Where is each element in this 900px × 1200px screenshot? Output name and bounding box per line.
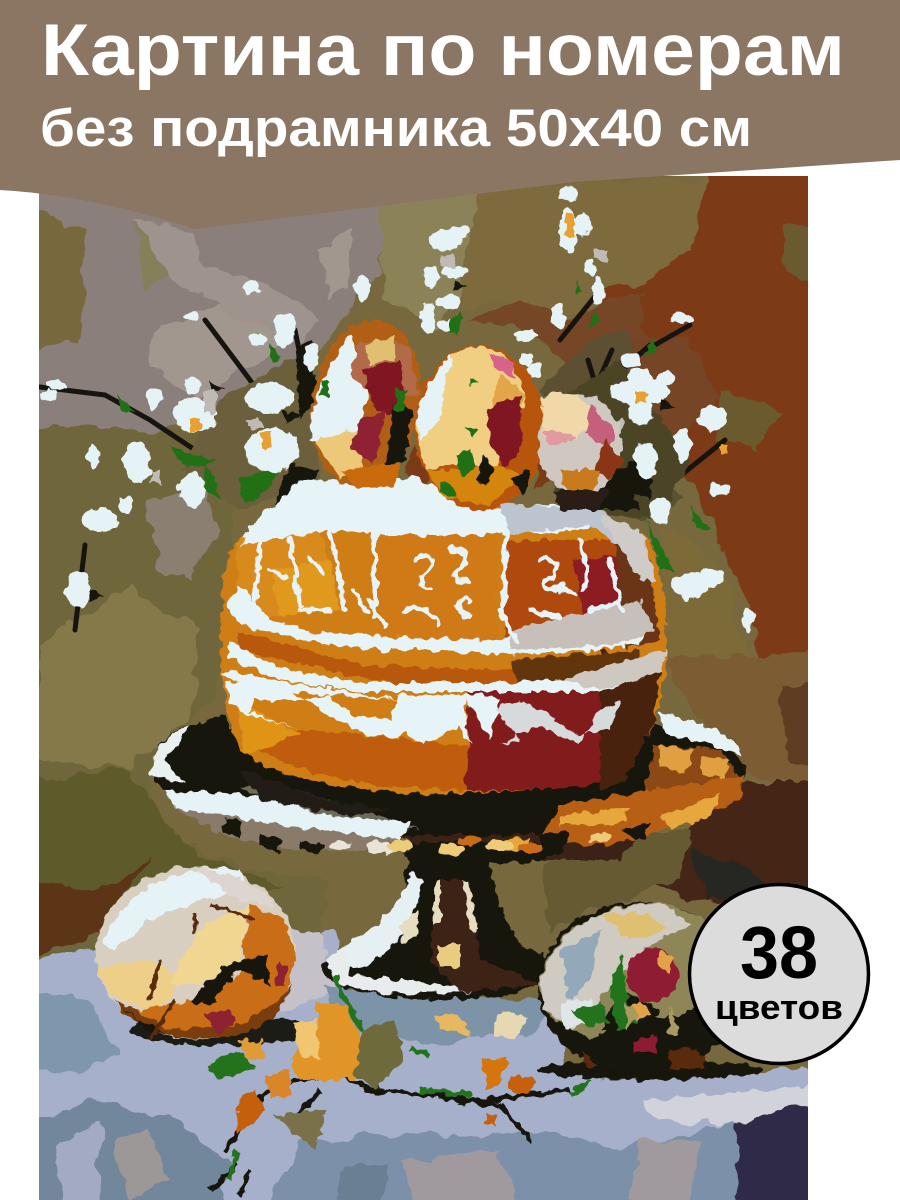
white icing [222, 478, 665, 745]
blossom centres, petals shade and green leaves [90, 215, 728, 602]
right painted egg on the table [538, 902, 762, 1080]
badge: 38 colours: цветов [715, 989, 843, 1027]
branches behind the cake [40, 290, 725, 630]
painted eggs on top of the cake [298, 311, 625, 510]
subtitle: без подрамника 50х40 см [40, 99, 752, 158]
badge: 38 colours: 38 [740, 911, 818, 994]
header banner [0, 0, 900, 229]
badge: 38 colours [690, 884, 868, 1064]
painting background wall [39, 176, 808, 1076]
glass cake stand [150, 708, 746, 1000]
painting: Easter cake still life [20, 160, 830, 1200]
table cloth [20, 930, 830, 1200]
left painted egg on the table [96, 867, 310, 1046]
title: Картина по номерам [41, 10, 845, 91]
kulich cake body [220, 503, 666, 793]
dark and olive foliage around the eggs [180, 340, 690, 520]
orange flowers and branch on the table [205, 975, 590, 1195]
white blossom clusters [39, 188, 754, 631]
